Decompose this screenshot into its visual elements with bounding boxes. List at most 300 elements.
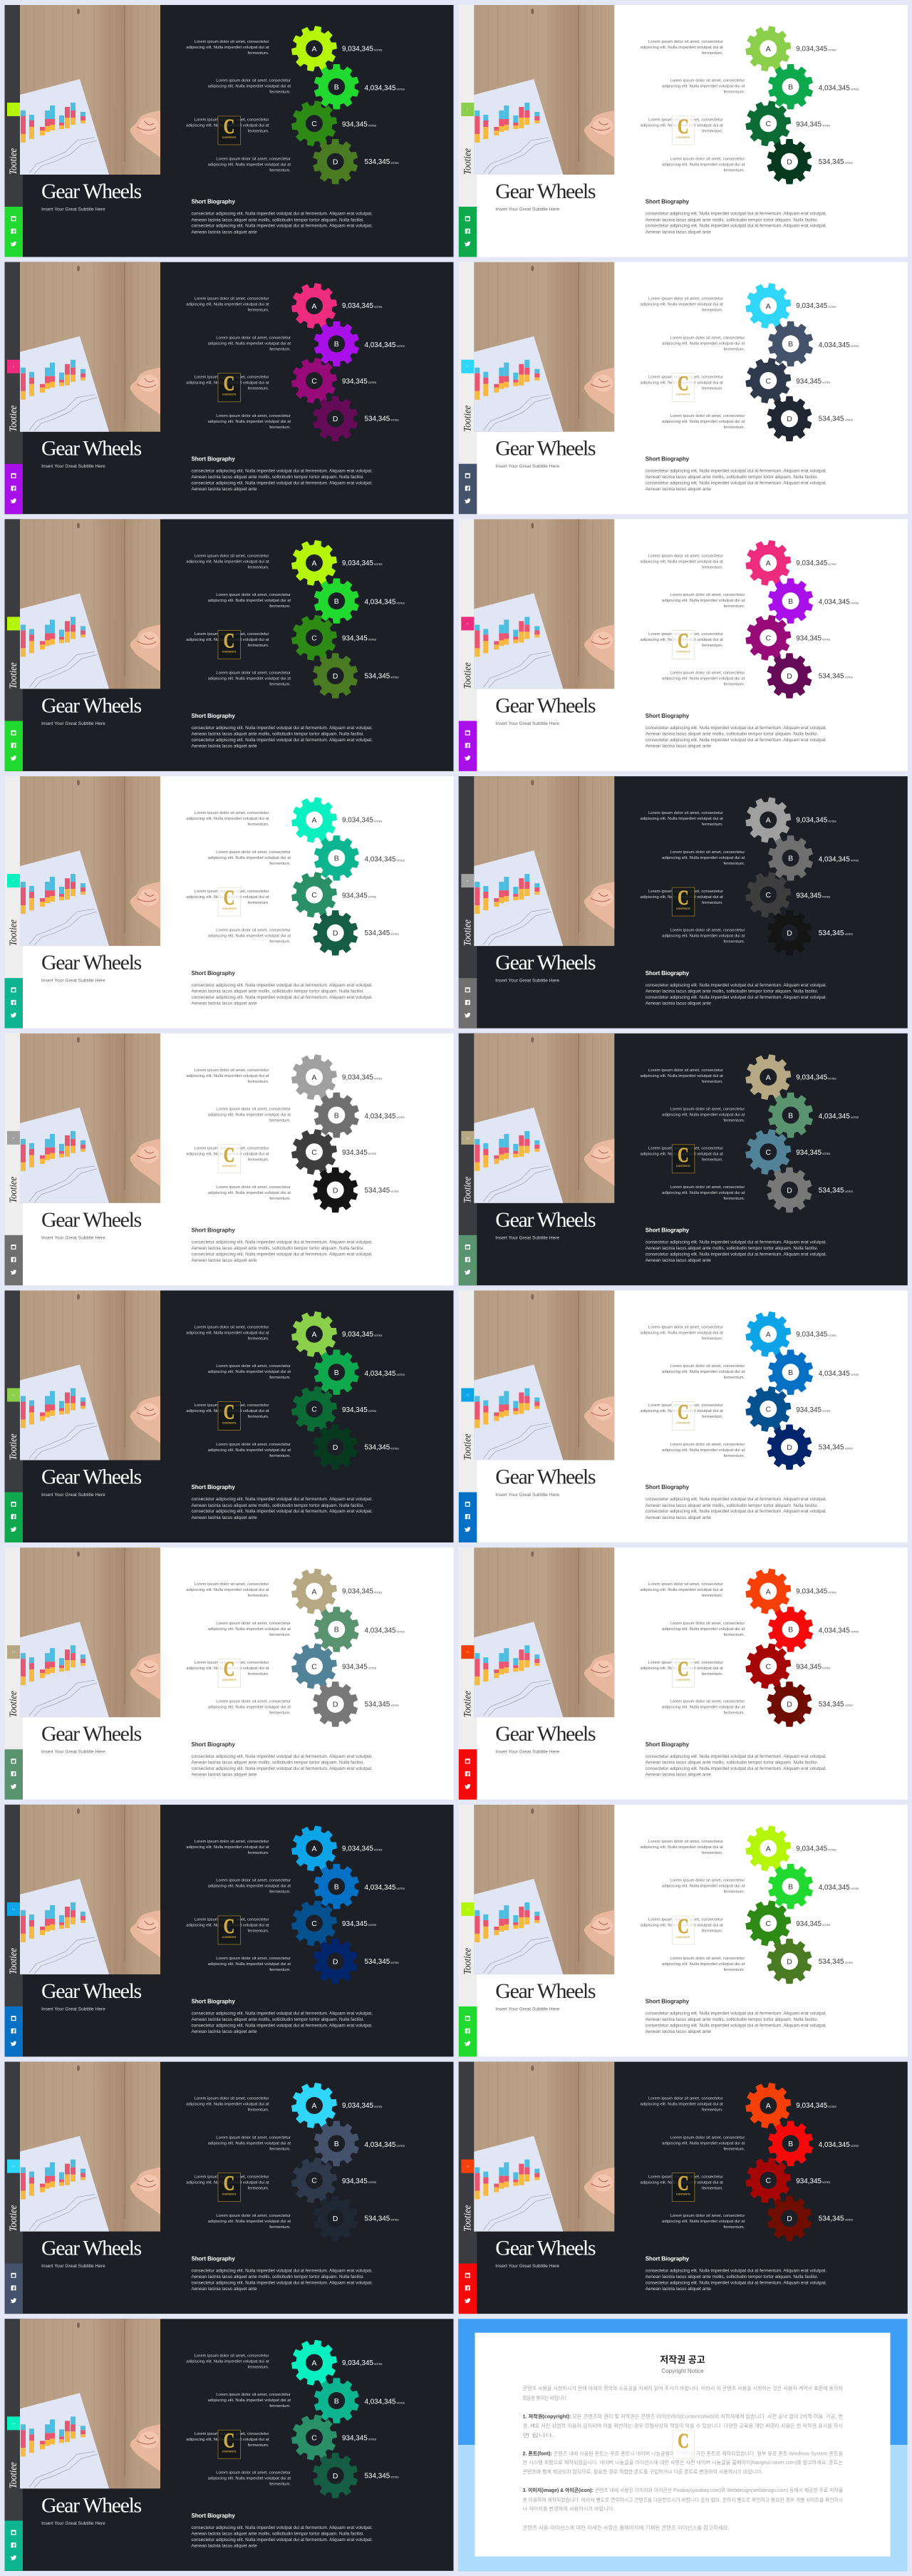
gear A [742, 1823, 794, 1875]
gear D: D [333, 2215, 338, 2223]
text A: adipiscing elit. Nulla imperdiet volutpat dui at [186, 560, 269, 564]
gear C: C [311, 120, 317, 128]
text A: Lorem ipsum dolor sit amet, consectetur [195, 297, 269, 302]
text A: fermentum. [702, 309, 723, 313]
gear D: D [787, 672, 792, 681]
bio text: consectetur adipiscing elit. Nulla imperdiet volutpat dui at fermentum. Aliquam erat volutpat. [646, 468, 826, 473]
social bar [4, 978, 23, 1029]
value C: 934,345 VOTES [342, 635, 377, 643]
gear B: B [788, 83, 793, 91]
photo [474, 262, 614, 432]
bio text: consectetur adipiscing elit. Nulla imperdiet volutpat dui at fermentum. Aliquam erat volutpat. [191, 995, 373, 1000]
value D: 534,345 VOTES [365, 672, 399, 680]
subtitle: Insert Your Great Subtitle Here [495, 2006, 559, 2011]
text B: adipiscing elit. Nulla imperdiet volutpat dui at [662, 2141, 745, 2145]
logo: CONTENTS [676, 907, 690, 910]
text B: Lorem ipsum dolor sit amet, consectetur [216, 1879, 291, 1883]
subtitle: Insert Your Great Subtitle Here [495, 464, 559, 469]
value B: 4,034,345 VOTES [819, 2141, 859, 2149]
bio heading: Short Biography [646, 1484, 690, 1490]
panel: slide 19 dark teal [4, 2319, 453, 2571]
slide marker [461, 360, 474, 373]
title: Gear Wheels [495, 694, 596, 717]
bio text: Aenean lacinia lacus aliquet ante [191, 2029, 257, 2034]
gear A: A [766, 1587, 771, 1596]
gear D [767, 653, 812, 699]
gear B [768, 2121, 813, 2166]
social bar [459, 978, 477, 1029]
gear A: A [311, 45, 317, 53]
text C: Lorem ipsum dolor sit amet, consectetur [648, 1918, 723, 1922]
bio text: Aenean lacinia lacus aliquet ante [646, 1772, 711, 1777]
gear A: A [311, 2102, 317, 2111]
title: Gear Wheels [41, 2237, 142, 2260]
text C: fermentum. [702, 644, 723, 648]
bio text: consectetur adipiscing elit. Nulla imperdiet volutpat dui at fermentum. Aliquam erat volutpat. [191, 224, 373, 229]
bio heading: Short Biography [191, 455, 235, 462]
text D: adipiscing elit. Nulla imperdiet volutpat dui at [662, 420, 745, 424]
logo: CONTENTS [222, 2193, 237, 2196]
text B: fermentum. [724, 91, 745, 95]
value D: 534,345 VOTES [819, 672, 854, 680]
gear D [767, 1939, 812, 1984]
title: Gear Wheels [495, 1722, 596, 1746]
text B: Lorem ipsum dolor sit amet, consectetur [216, 2135, 291, 2140]
text C: fermentum. [248, 2186, 269, 2190]
bio text: Aenean lacinia lacus aliquet ante mollis, sollicitudin tempor tortor aliquam. Nulla facilisi. [191, 732, 364, 737]
slide marker: 7 [13, 879, 15, 882]
gear C: C [311, 2177, 317, 2185]
social bar [459, 2264, 477, 2314]
title: Gear Wheels [41, 694, 142, 717]
logo [672, 1915, 695, 1944]
text B: adipiscing elit. Nulla imperdiet volutpat dui at [662, 85, 745, 89]
value C: 934,345 VOTES [796, 378, 831, 386]
bio text: Aenean lacinia lacus aliquet ante mollis, sollicitudin tempor tortor aliquam. Nulla facilisi. [646, 217, 819, 222]
slide marker [461, 1131, 474, 1145]
bio text: consectetur adipiscing elit. Nulla imperdiet volutpat dui at fermentum. Aliquam erat volutpat. [191, 480, 373, 485]
text B: Lorem ipsum dolor sit amet, consectetur [216, 593, 291, 597]
gear D [313, 2196, 358, 2241]
value A: 9,034,345 VOTES [342, 46, 383, 53]
bio heading: Short Biography [191, 2513, 235, 2519]
gear B [314, 2378, 359, 2423]
gear A: A [766, 2102, 771, 2111]
text B: adipiscing elit. Nulla imperdiet volutpat dui at [662, 1113, 745, 1118]
value C: 934,345 VOTES [342, 1406, 377, 1414]
slide marker [7, 1131, 20, 1145]
bio heading: Short Biography [646, 2255, 690, 2262]
brand: Tootiee [462, 1433, 473, 1460]
subtitle: Insert Your Great Subtitle Here [495, 1750, 559, 1755]
text D: fermentum. [269, 1454, 291, 1458]
value C: 934,345 VOTES [796, 120, 831, 128]
text A: fermentum. [702, 1080, 723, 1084]
text D: Lorem ipsum dolor sit amet, consectetur [670, 1957, 745, 1961]
bio heading: Short Biography [191, 713, 235, 719]
brand: Tootiee [8, 1691, 19, 1717]
bio heading: Short Biography [191, 1227, 235, 1234]
text C: adipiscing elit. Nulla imperdiet volutpat dui at [641, 638, 723, 642]
value B: 4,034,345 VOTES [819, 599, 859, 607]
panel: slide 18 dark red [459, 2062, 908, 2314]
text C: adipiscing elit. Nulla imperdiet volutpat dui at [641, 381, 723, 385]
bio text: Aenean lacinia lacus aliquet ante mollis, sollicitudin tempor tortor aliquam. Nulla facilisi. [191, 2274, 364, 2279]
bio text: Aenean lacinia lacus aliquet ante [191, 2287, 257, 2292]
bio text: Aenean lacinia lacus aliquet ante [646, 2287, 711, 2292]
value A: 9,034,345 VOTES [342, 1073, 383, 1081]
text C: fermentum. [702, 130, 723, 134]
gear B: B [788, 1626, 793, 1634]
gear A [288, 1308, 341, 1360]
gear C [742, 354, 794, 407]
bio text: Aenean lacinia lacus aliquet ante [646, 230, 711, 235]
logo: C [678, 1143, 689, 1167]
gear C: C [311, 634, 317, 643]
text D: adipiscing elit. Nulla imperdiet volutpat dui at [208, 420, 291, 424]
text D: Lorem ipsum dolor sit amet, consectetur [670, 671, 745, 676]
value A: 9,034,345 VOTES [342, 817, 383, 825]
gear A [742, 23, 794, 75]
panel: slide 2 white green [459, 5, 908, 257]
text C: adipiscing elit. Nulla imperdiet volutpat dui at [641, 1153, 723, 1157]
text C: fermentum. [248, 130, 269, 134]
value B: 4,034,345 VOTES [819, 1370, 859, 1378]
text C: fermentum. [702, 1415, 723, 1419]
text C: fermentum. [248, 1930, 269, 1934]
title: Gear Wheels [495, 2237, 596, 2260]
gear B: B [788, 597, 793, 606]
gear A [288, 537, 341, 589]
text D: adipiscing elit. Nulla imperdiet volutpat dui at [662, 1448, 745, 1453]
value D: 534,345 VOTES [819, 1701, 854, 1709]
value A: 9,034,345 VOTES [342, 2102, 383, 2110]
text D: Lorem ipsum dolor sit amet, consectetur [216, 1185, 291, 1190]
text C: fermentum. [248, 2443, 269, 2448]
subtitle: Insert Your Great Subtitle Here [41, 1493, 105, 1498]
text A: adipiscing elit. Nulla imperdiet volutpat dui at [641, 46, 723, 50]
logo [218, 1657, 241, 1687]
gear B [314, 1093, 359, 1138]
panel: slide 6 white pink [459, 519, 908, 771]
text A: fermentum. [248, 1594, 269, 1598]
bio text: consectetur adipiscing elit. Nulla imperdiet volutpat dui at fermentum. Aliquam erat volutpat. [191, 1252, 373, 1257]
gear D [767, 139, 812, 184]
social bar [4, 2264, 23, 2314]
photo [20, 262, 160, 432]
gear A: A [311, 302, 317, 311]
bio text: consectetur adipiscing elit. Nulla imperdiet volutpat dui at fermentum. Aliquam erat volutpat. [646, 983, 826, 988]
value C: 934,345 VOTES [796, 1406, 831, 1414]
logo: C [678, 1400, 689, 1423]
slide marker: 1 [13, 108, 15, 111]
text D: Lorem ipsum dolor sit amet, consectetur [216, 157, 291, 161]
text A: fermentum. [248, 2365, 269, 2369]
bio text: consectetur adipiscing elit. Nulla imperdiet volutpat dui at fermentum. Aliquam erat volutpat. [191, 983, 373, 988]
value B: 4,034,345 VOTES [819, 1627, 859, 1634]
text B: fermentum. [269, 91, 291, 95]
copyright clause 3: 나 이미지를 변경하여 사용하시기 바랍니다. [523, 2505, 615, 2512]
social bar [459, 1493, 477, 1542]
copyright clause 1: 면 됩니다. [523, 2432, 554, 2438]
gear C [742, 1383, 794, 1435]
gear D: D [787, 1701, 792, 1709]
text D: adipiscing elit. Nulla imperdiet volutpat dui at [208, 163, 291, 167]
value C: 934,345 VOTES [342, 1663, 377, 1671]
text C: Lorem ipsum dolor sit amet, consectetur [648, 1661, 723, 1665]
photo [474, 519, 614, 689]
logo [218, 1915, 241, 1944]
copyright clause 1 [523, 2413, 843, 2438]
text D: fermentum. [269, 1968, 291, 1972]
gear B: B [788, 1111, 793, 1120]
text B: fermentum. [724, 1376, 745, 1380]
text D: Lorem ipsum dolor sit amet, consectetur [216, 1957, 291, 1961]
gear D [313, 2453, 358, 2498]
value A: 9,034,345 VOTES [796, 817, 836, 825]
gear A [288, 279, 341, 332]
bio text: Aenean lacinia lacus aliquet ante [191, 230, 257, 235]
text A: fermentum. [248, 1080, 269, 1084]
text D: Lorem ipsum dolor sit amet, consectetur [670, 2214, 745, 2218]
social bar [4, 2006, 23, 2056]
text D: Lorem ipsum dolor sit amet, consectetur [216, 2471, 291, 2475]
text C: adipiscing elit. Nulla imperdiet volutpat dui at [641, 124, 723, 128]
photo [20, 2062, 160, 2232]
text D: fermentum. [269, 168, 291, 172]
text B: fermentum. [724, 1890, 745, 1895]
value D: 534,345 VOTES [819, 1444, 854, 1451]
text B: adipiscing elit. Nulla imperdiet volutpat dui at [208, 1885, 291, 1889]
subtitle: Insert Your Great Subtitle Here [41, 464, 105, 469]
bio text: consectetur adipiscing elit. Nulla imperdiet volutpat dui at fermentum. Aliquam erat volutpat. [646, 212, 826, 217]
text A: adipiscing elit. Nulla imperdiet volutpat dui at [186, 1845, 269, 1850]
value A: 9,034,345 VOTES [796, 1073, 836, 1081]
title: Gear Wheels [41, 1722, 142, 1746]
photo [20, 5, 160, 175]
value D: 534,345 VOTES [365, 1958, 399, 1966]
gear B: B [788, 340, 793, 349]
gear B [768, 1607, 813, 1652]
slide marker: 16 [466, 1907, 470, 1911]
gear A [288, 794, 341, 846]
text D: Lorem ipsum dolor sit amet, consectetur [216, 1443, 291, 1447]
logo: CONTENTS [222, 1165, 237, 1168]
text B: adipiscing elit. Nulla imperdiet volutpat dui at [662, 341, 745, 346]
gear B [768, 64, 813, 109]
logo: C [678, 1657, 689, 1681]
value C: 934,345 VOTES [796, 2178, 831, 2185]
bio text: Aenean lacinia lacus aliquet ante mollis, sollicitudin tempor tortor aliquam. Nulla facilisi. [191, 2017, 364, 2022]
gear C [742, 1897, 794, 1949]
text D: fermentum. [724, 1454, 745, 1458]
text B: Lorem ipsum dolor sit amet, consectetur [670, 1364, 745, 1369]
text A: fermentum. [248, 565, 269, 570]
bio text: consectetur adipiscing elit. Nulla imperdiet volutpat dui at fermentum. Aliquam erat volutpat. [191, 2268, 373, 2273]
value D: 534,345 VOTES [365, 1187, 399, 1195]
slide marker [7, 2416, 20, 2430]
text C: Lorem ipsum dolor sit amet, consectetur [648, 1403, 723, 1408]
text D: fermentum. [269, 1197, 291, 1201]
text A: Lorem ipsum dolor sit amet, consectetur [195, 2097, 269, 2101]
logo: C [224, 1143, 234, 1167]
value C: 934,345 VOTES [342, 892, 377, 900]
gear C: C [311, 1920, 317, 1928]
photo [20, 1547, 160, 1717]
logo: C [224, 115, 234, 138]
gear C: C [766, 1662, 772, 1671]
text C: adipiscing elit. Nulla imperdiet volutpat dui at [186, 1666, 269, 1671]
gear B [314, 1864, 359, 1909]
value A: 9,034,345 VOTES [796, 302, 836, 310]
logo: C [678, 886, 689, 910]
copyright clause 2: 한 시스템 포함으로 제작되었습니다. 네이버 나눔글꼴 라이선스에 대한 사항은 사전 네이버 나눔글꼴 홈페이지(hangeul.naver.com)를 참고하세요. 폰트는 [523, 2459, 844, 2466]
gear A [288, 2079, 341, 2132]
slide marker [7, 1389, 20, 1401]
copyright clause 3: 3. 이미지(image) & 아이콘(icon): 콘텐츠 내에 사용된 이미지와 아이콘은 Pixabay(pixabay.com)와 Webdesign(webdesign.com) 등에서 제공한 무료 저작물 [523, 2487, 844, 2493]
photo [20, 776, 160, 946]
bio text: consectetur adipiscing elit. Nulla imperdiet volutpat dui at fermentum. Aliquam erat volutpat. [646, 1252, 827, 1257]
panel: slide 10 dark tan [459, 1034, 908, 1285]
gear B: B [334, 340, 339, 349]
bio text: consectetur adipiscing elit. Nulla imperdiet volutpat dui at fermentum. Aliquam erat volutpat. [191, 1509, 373, 1514]
gear C [742, 98, 794, 150]
gear B [314, 321, 359, 366]
gear D [767, 910, 812, 955]
text B: fermentum. [269, 2404, 291, 2408]
copyright intro: 콘텐츠 사용을 시청하시기 전에 아래의 정의와 소유권을 자세히 읽어 주시기 바랍니다. 따라서 이 콘텐츠 사용을 시청하는 것은 사용자 계약서 표준에 동의하 [523, 2385, 844, 2391]
bio text: consectetur adipiscing elit. Nulla imperdiet volutpat dui at fermentum. Aliquam erat volutpat. [191, 738, 373, 743]
gear D [767, 396, 812, 441]
text C: Lorem ipsum dolor sit amet, consectetur [195, 1146, 269, 1150]
copyright subtitle: Copyright Notice [661, 2368, 704, 2374]
value B: 4,034,345 VOTES [365, 1113, 405, 1120]
value C: 934,345 VOTES [796, 1663, 831, 1671]
slide marker [461, 103, 474, 116]
bio text: consectetur adipiscing elit. Nulla imperdiet volutpat dui at fermentum. Aliquam erat volutpat. [646, 726, 826, 731]
slide marker [461, 1645, 474, 1659]
text C: fermentum. [248, 1158, 269, 1163]
value B: 4,034,345 VOTES [365, 84, 405, 92]
copyright closing: 콘텐츠 사용 라이선스에 대한 자세한 사항은 홈페이지에 기재된 콘텐츠 라이선스를 참고하세요. [523, 2525, 730, 2531]
gear A: A [766, 1331, 771, 1339]
text A: fermentum. [702, 1337, 723, 1341]
value A: 9,034,345 VOTES [796, 2102, 836, 2110]
social bar [459, 1235, 477, 1285]
logo: C [224, 1915, 234, 1938]
brand: Tootiee [8, 2462, 19, 2488]
gear D [313, 1681, 358, 1727]
gear B: B [334, 1369, 339, 1377]
panel: slide 8 dark gray [459, 776, 908, 1029]
value B: 4,034,345 VOTES [819, 341, 859, 349]
gear C [288, 612, 341, 664]
logo [672, 629, 695, 659]
gear A: A [311, 560, 317, 568]
logo: CONTENTS [222, 1679, 237, 1681]
text A: fermentum. [248, 1851, 269, 1855]
value A: 9,034,345 VOTES [796, 1845, 836, 1853]
slide marker: 3 [13, 365, 15, 369]
slide marker [7, 2160, 20, 2173]
text D: fermentum. [724, 2225, 745, 2230]
text B: adipiscing elit. Nulla imperdiet volutpat dui at [662, 1627, 745, 1632]
slide marker: 12 [466, 1393, 470, 1397]
text A: fermentum. [702, 1851, 723, 1855]
panel: copyright notice [458, 2319, 908, 2572]
bio heading: Short Biography [646, 455, 690, 462]
bio text: consectetur adipiscing elit. Nulla imperdiet volutpat dui at fermentum. Aliquam erat volutpat. [646, 1766, 827, 1771]
bio text: consectetur adipiscing elit. Nulla imperdiet volutpat dui at fermentum. Aliquam erat volutpat. [646, 2280, 827, 2285]
text A: fermentum. [248, 2108, 269, 2113]
value B: 4,034,345 VOTES [365, 1627, 405, 1634]
text D: Lorem ipsum dolor sit amet, consectetur [670, 1699, 745, 1704]
value D: 534,345 VOTES [819, 416, 854, 423]
gear C [288, 1383, 341, 1435]
text D: adipiscing elit. Nulla imperdiet volutpat dui at [662, 934, 745, 938]
social bar [4, 1235, 23, 1285]
text A: adipiscing elit. Nulla imperdiet volutpat dui at [186, 1074, 269, 1078]
text C: adipiscing elit. Nulla imperdiet volutpat dui at [186, 124, 269, 128]
logo: CONTENTS [676, 136, 690, 139]
bio heading: Short Biography [191, 1999, 235, 2005]
gear C: C [311, 377, 317, 386]
social bar [4, 1749, 23, 1800]
brand: Tootiee [462, 2205, 473, 2232]
gear A: A [766, 302, 771, 311]
text B: fermentum. [269, 1633, 291, 1637]
slide marker: 11 [12, 1393, 16, 1397]
logo: C [678, 1915, 689, 1938]
text C: Lorem ipsum dolor sit amet, consectetur [648, 890, 723, 894]
gear A: A [766, 1073, 771, 1082]
text A: adipiscing elit. Nulla imperdiet volutpat dui at [641, 1588, 723, 1592]
value D: 534,345 VOTES [819, 1958, 854, 1966]
subtitle: Insert Your Great Subtitle Here [41, 1750, 105, 1755]
subtitle: Insert Your Great Subtitle Here [41, 979, 105, 984]
bio text: consectetur adipiscing elit. Nulla imperdiet volutpat dui at fermentum. Aliquam erat volutpat. [646, 480, 827, 485]
gear B [768, 1350, 813, 1395]
slide marker: 6 [467, 622, 469, 625]
photo [474, 1547, 614, 1717]
text D: fermentum. [269, 1711, 291, 1715]
logo: C [678, 2429, 689, 2453]
text D: fermentum. [724, 683, 745, 687]
logo [672, 115, 695, 145]
slide marker [461, 1902, 474, 1916]
gear D [767, 1168, 812, 1212]
logo: CONTENTS [222, 650, 237, 653]
text A: adipiscing elit. Nulla imperdiet volutpat dui at [641, 817, 723, 821]
gear C [288, 1125, 341, 1178]
bio text: Aenean lacinia lacus aliquet ante [191, 744, 257, 749]
text A: Lorem ipsum dolor sit amet, consectetur [195, 2354, 269, 2358]
bio text: Aenean lacinia lacus aliquet ante mollis, sollicitudin tempor tortor aliquam. Nulla facilisi. [646, 475, 819, 480]
text B: adipiscing elit. Nulla imperdiet volutpat dui at [208, 2399, 291, 2403]
text A: adipiscing elit. Nulla imperdiet volutpat dui at [186, 303, 269, 307]
text D: adipiscing elit. Nulla imperdiet volutpat dui at [662, 163, 745, 167]
gear D: D [333, 1701, 338, 1709]
logo [218, 2171, 241, 2202]
gear D [313, 1168, 358, 1212]
panel: slide 15 dark blue [4, 1805, 453, 2056]
text C: adipiscing elit. Nulla imperdiet volutpat dui at [641, 1409, 723, 1413]
gear C: C [311, 1148, 317, 1157]
gear B: B [334, 2397, 339, 2406]
gear B: B [788, 2140, 793, 2148]
value A: 9,034,345 VOTES [342, 1588, 383, 1596]
text C: adipiscing elit. Nulla imperdiet volutpat dui at [641, 895, 723, 900]
